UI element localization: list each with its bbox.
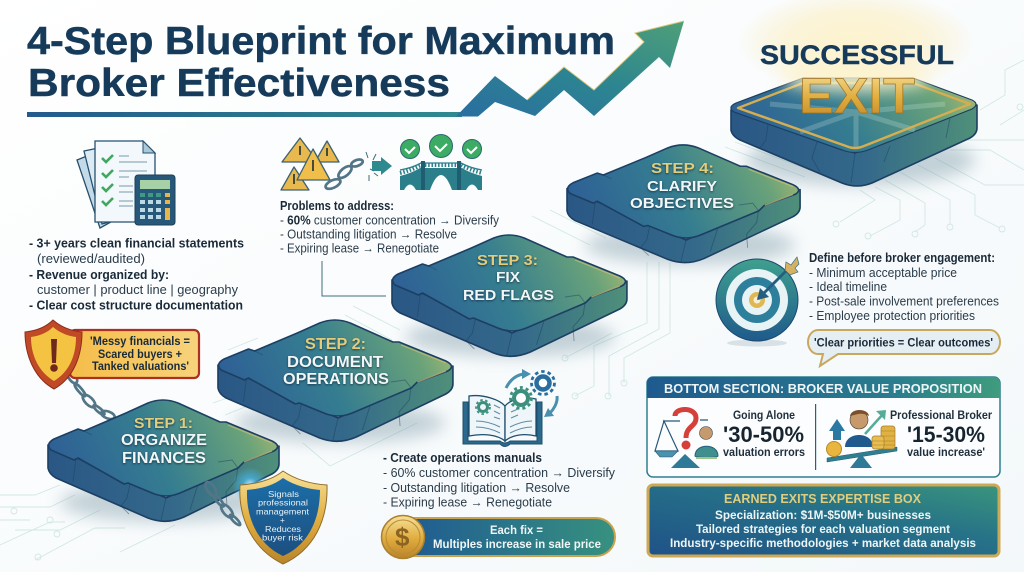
text: financial requirements [29, 236, 244, 312]
text: financial requirements: - Revenue organized by: [29, 268, 169, 282]
text: define before broker engagement: - Post-sale involvement preferences [809, 294, 999, 308]
text: problems to address: - Outstanding litigation → Resolve [280, 228, 457, 242]
successful exit glow [738, 0, 974, 94]
callout: each fix: $ [395, 522, 410, 552]
step 1 label: FINANCES [122, 450, 206, 467]
chain: warning to step 1 [65, 367, 116, 421]
panel: broker value proposition: '15-30% [907, 422, 985, 447]
step 3 label: RED FLAGS [463, 287, 554, 304]
icon: manual with gears [463, 369, 557, 446]
shield: professional management [232, 467, 327, 564]
text: financial requirements: - 3+ years clean financial statements [29, 236, 244, 250]
slab: step 4 [567, 145, 800, 265]
title underline and rising arrow [27, 21, 684, 117]
successful exit label: SUCCESSFUL [760, 40, 954, 70]
step 3 label: STEP 3: [477, 253, 538, 269]
title [27, 20, 615, 105]
text: operations manuals: - Outstanding litigation → Resolve [383, 481, 570, 495]
step 2 label: OPERATIONS [283, 371, 389, 388]
warning callout: Scared buyers + [98, 349, 182, 361]
shield: professional management: Reduces [265, 524, 301, 534]
panel: earned exits expertise box: Tailored strategies for each valuation segment [696, 522, 950, 536]
icon: scales and question mark [655, 409, 718, 468]
panel: earned exits expertise box: Specialization: $1M-$50M+ businesses [715, 508, 931, 522]
successful exit label: EXIT [799, 68, 915, 124]
shield: professional management: management [256, 506, 310, 516]
panel: earned exits expertise box: EARNED EXITS EXPERTISE BOX [724, 491, 921, 506]
panel: broker value proposition: valuation errors [723, 445, 805, 459]
callout: each fix: Each fix = [490, 523, 543, 537]
step 4 label: CLARIFY [647, 178, 717, 195]
text: operations manuals: - Expiring lease → Renegotiate [383, 496, 552, 510]
warning callout: Tanked valuations' [92, 361, 189, 373]
icon: broker and rising coins [826, 410, 897, 468]
text: operations manuals [383, 451, 616, 510]
text: define before broker engagement: - Ideal timeline [809, 280, 887, 294]
text: problems to address [280, 199, 500, 256]
callout: each fix: Multiples increase in sale price [433, 537, 601, 551]
panel: earned exits expertise box [648, 485, 999, 556]
text: operations manuals: - 60% customer concentration → Diversify [383, 466, 616, 480]
text: operations manuals: - Create operations manuals [383, 451, 542, 465]
step 2 label: DOCUMENT [287, 354, 384, 371]
step 1 label: STEP 1: [134, 415, 193, 432]
step 1 label: ORGANIZE [121, 432, 207, 449]
text: financial requirements: (reviewed/audited) [37, 252, 145, 266]
slab: step 2 [218, 320, 453, 443]
successful exit label [760, 40, 954, 124]
slab: step 1 [48, 400, 279, 522]
chain: step 1 to shield [203, 480, 241, 526]
text: define before broker engagement: - Employee protection priorities [809, 309, 975, 323]
icon: documents and calculator [77, 141, 175, 228]
step 2 label: STEP 2: [305, 336, 366, 353]
text: problems to address: - Expiring lease → Renegotiate [280, 242, 439, 256]
panel: broker value proposition [647, 377, 1000, 477]
slab: step 3 [392, 235, 627, 357]
title: Broker Effectiveness [28, 62, 450, 105]
panel: broker value proposition: Going Alone [733, 408, 795, 422]
text: problems to address: Problems to address: [280, 199, 394, 213]
callout: clear priorities: 'Clear priorities = Clear outcomes' [814, 336, 993, 350]
panel: broker value proposition: '30-50% [723, 422, 804, 447]
step 1 label [121, 415, 207, 467]
text: financial requirements: customer | product line | geography [37, 283, 239, 297]
text: define before broker engagement: - Minimum acceptable price [809, 266, 957, 280]
step 2 label [283, 336, 389, 388]
warning callout [25, 320, 199, 389]
callout: clear priorities [808, 330, 1000, 366]
shield: professional management: buyer risk [262, 532, 304, 542]
panel: broker value proposition: Professional Broker [890, 408, 992, 422]
text: define before broker engagement: Define before broker engagement: [809, 251, 995, 265]
shield: professional management: + [280, 515, 285, 525]
text: define before broker engagement [809, 251, 999, 323]
panel: broker value proposition: value increase' [907, 445, 985, 459]
step 4 label [630, 161, 734, 212]
connector: problems to step 3 [322, 261, 386, 296]
title: 4-Step Blueprint for Maximum [27, 20, 615, 63]
step 4 label: STEP 4: [651, 161, 714, 177]
shield: professional management: Signals [268, 489, 299, 499]
callout: each fix [382, 516, 615, 558]
warning callout: 'Messy financials = [90, 336, 190, 348]
slab: exit [731, 78, 977, 186]
step 3 label [463, 253, 554, 304]
icon: warnings, broken chain and bridge [281, 134, 482, 191]
icon: target with arrow [716, 257, 799, 346]
step 4 label: OBJECTIVES [630, 195, 734, 212]
shield: professional management: professional [258, 498, 308, 508]
step 3 label: FIX [496, 269, 520, 286]
panel: broker value proposition: BOTTOM SECTION: BROKER VALUE PROPOSITION [664, 381, 982, 396]
text: problems to address: - 60% customer concentration → Diversify [280, 214, 500, 228]
text: financial requirements: - Clear cost structure documentation [29, 298, 243, 312]
panel: earned exits expertise box: Industry-specific methodologies + market data analysis [670, 536, 976, 550]
